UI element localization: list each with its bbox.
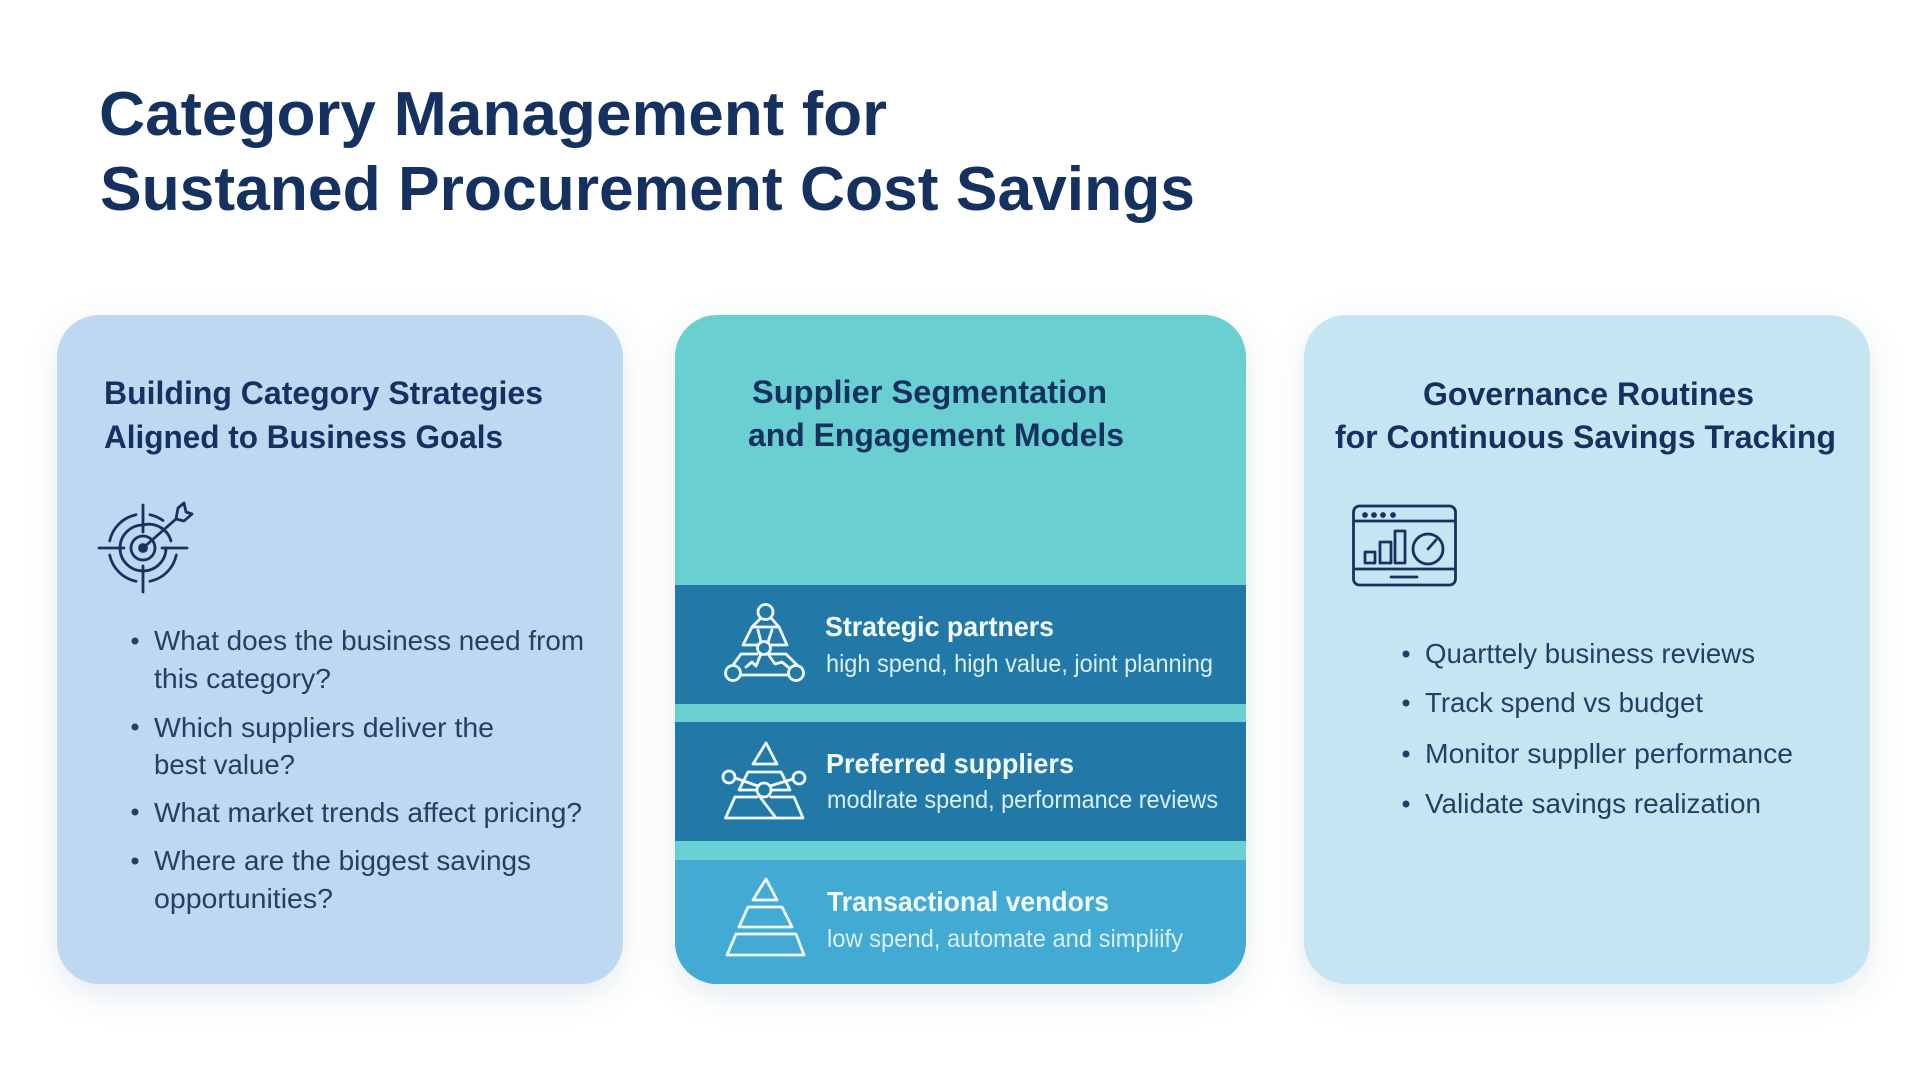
list: governance routines: Validate savings realization bbox=[1425, 788, 1761, 819]
heading: supplier segmentation: Supplier Segmentation bbox=[752, 374, 1107, 410]
list: category questions: this category? bbox=[154, 663, 331, 694]
panel: supplier segmentation bbox=[675, 315, 1246, 984]
heading: governance routines: Governance Routines bbox=[1423, 376, 1754, 412]
list: category questions: What does the business need from bbox=[154, 625, 584, 656]
list: category questions: Where are the biggest savings bbox=[154, 845, 531, 876]
icon: target with arrow bbox=[99, 503, 192, 592]
list: governance routines: Monitor suppller performance bbox=[1425, 738, 1793, 769]
heading: supplier segmentation: and Engagement Models bbox=[748, 417, 1124, 453]
heading: building category strategies: Building Category Strategies bbox=[104, 375, 543, 411]
panel: governance routines bbox=[1304, 315, 1870, 984]
list: governance routines: Quarttely business reviews bbox=[1425, 638, 1755, 669]
heading: building category strategies bbox=[104, 375, 543, 455]
heading: governance routines bbox=[1335, 376, 1836, 455]
list: category questions bbox=[132, 625, 584, 914]
text: strategic partners: high spend, high value, joint planning bbox=[826, 650, 1213, 678]
text: strategic partners bbox=[825, 611, 1213, 678]
text: preferred suppliers bbox=[826, 748, 1218, 814]
list: category questions: opportunities? bbox=[154, 883, 333, 914]
panel: building category strategies bbox=[57, 315, 623, 984]
heading: building category strategies: Aligned to Business Goals bbox=[104, 419, 503, 455]
text: transactional vendors: low spend, automate and simpliify bbox=[827, 925, 1183, 953]
text: preferred suppliers: modlrate spend, performance reviews bbox=[827, 786, 1218, 814]
list: governance routines bbox=[1402, 638, 1793, 819]
heading: governance routines: for Continuous Savings Tracking bbox=[1335, 419, 1836, 455]
text: transactional vendors bbox=[827, 886, 1183, 953]
band: strategic partners bbox=[675, 585, 1246, 704]
band: preferred suppliers bbox=[675, 722, 1246, 841]
icon: dashboard window bbox=[1354, 506, 1456, 585]
list: category questions: What market trends affect pricing? bbox=[154, 797, 582, 828]
list: category questions: Which suppliers deliver the bbox=[154, 712, 494, 743]
text: preferred suppliers: Preferred suppliers bbox=[826, 748, 1074, 779]
list: category questions: best value? bbox=[154, 749, 295, 780]
icon: strategic partners network pyramid bbox=[726, 604, 804, 680]
text: strategic partners: Strategic partners bbox=[825, 611, 1054, 642]
band: transactional vendors bbox=[675, 860, 1246, 984]
title: Sustaned Procurement Cost Savings bbox=[100, 155, 1195, 224]
icon: preferred suppliers pyramid bbox=[723, 743, 805, 818]
text: transactional vendors: Transactional vendors bbox=[827, 886, 1109, 917]
icon: transactional pyramid bbox=[727, 879, 804, 955]
list: governance routines: Track spend vs budget bbox=[1425, 687, 1703, 718]
title: Category Management for bbox=[99, 80, 887, 149]
heading: supplier segmentation bbox=[748, 374, 1124, 453]
title bbox=[99, 80, 1195, 224]
